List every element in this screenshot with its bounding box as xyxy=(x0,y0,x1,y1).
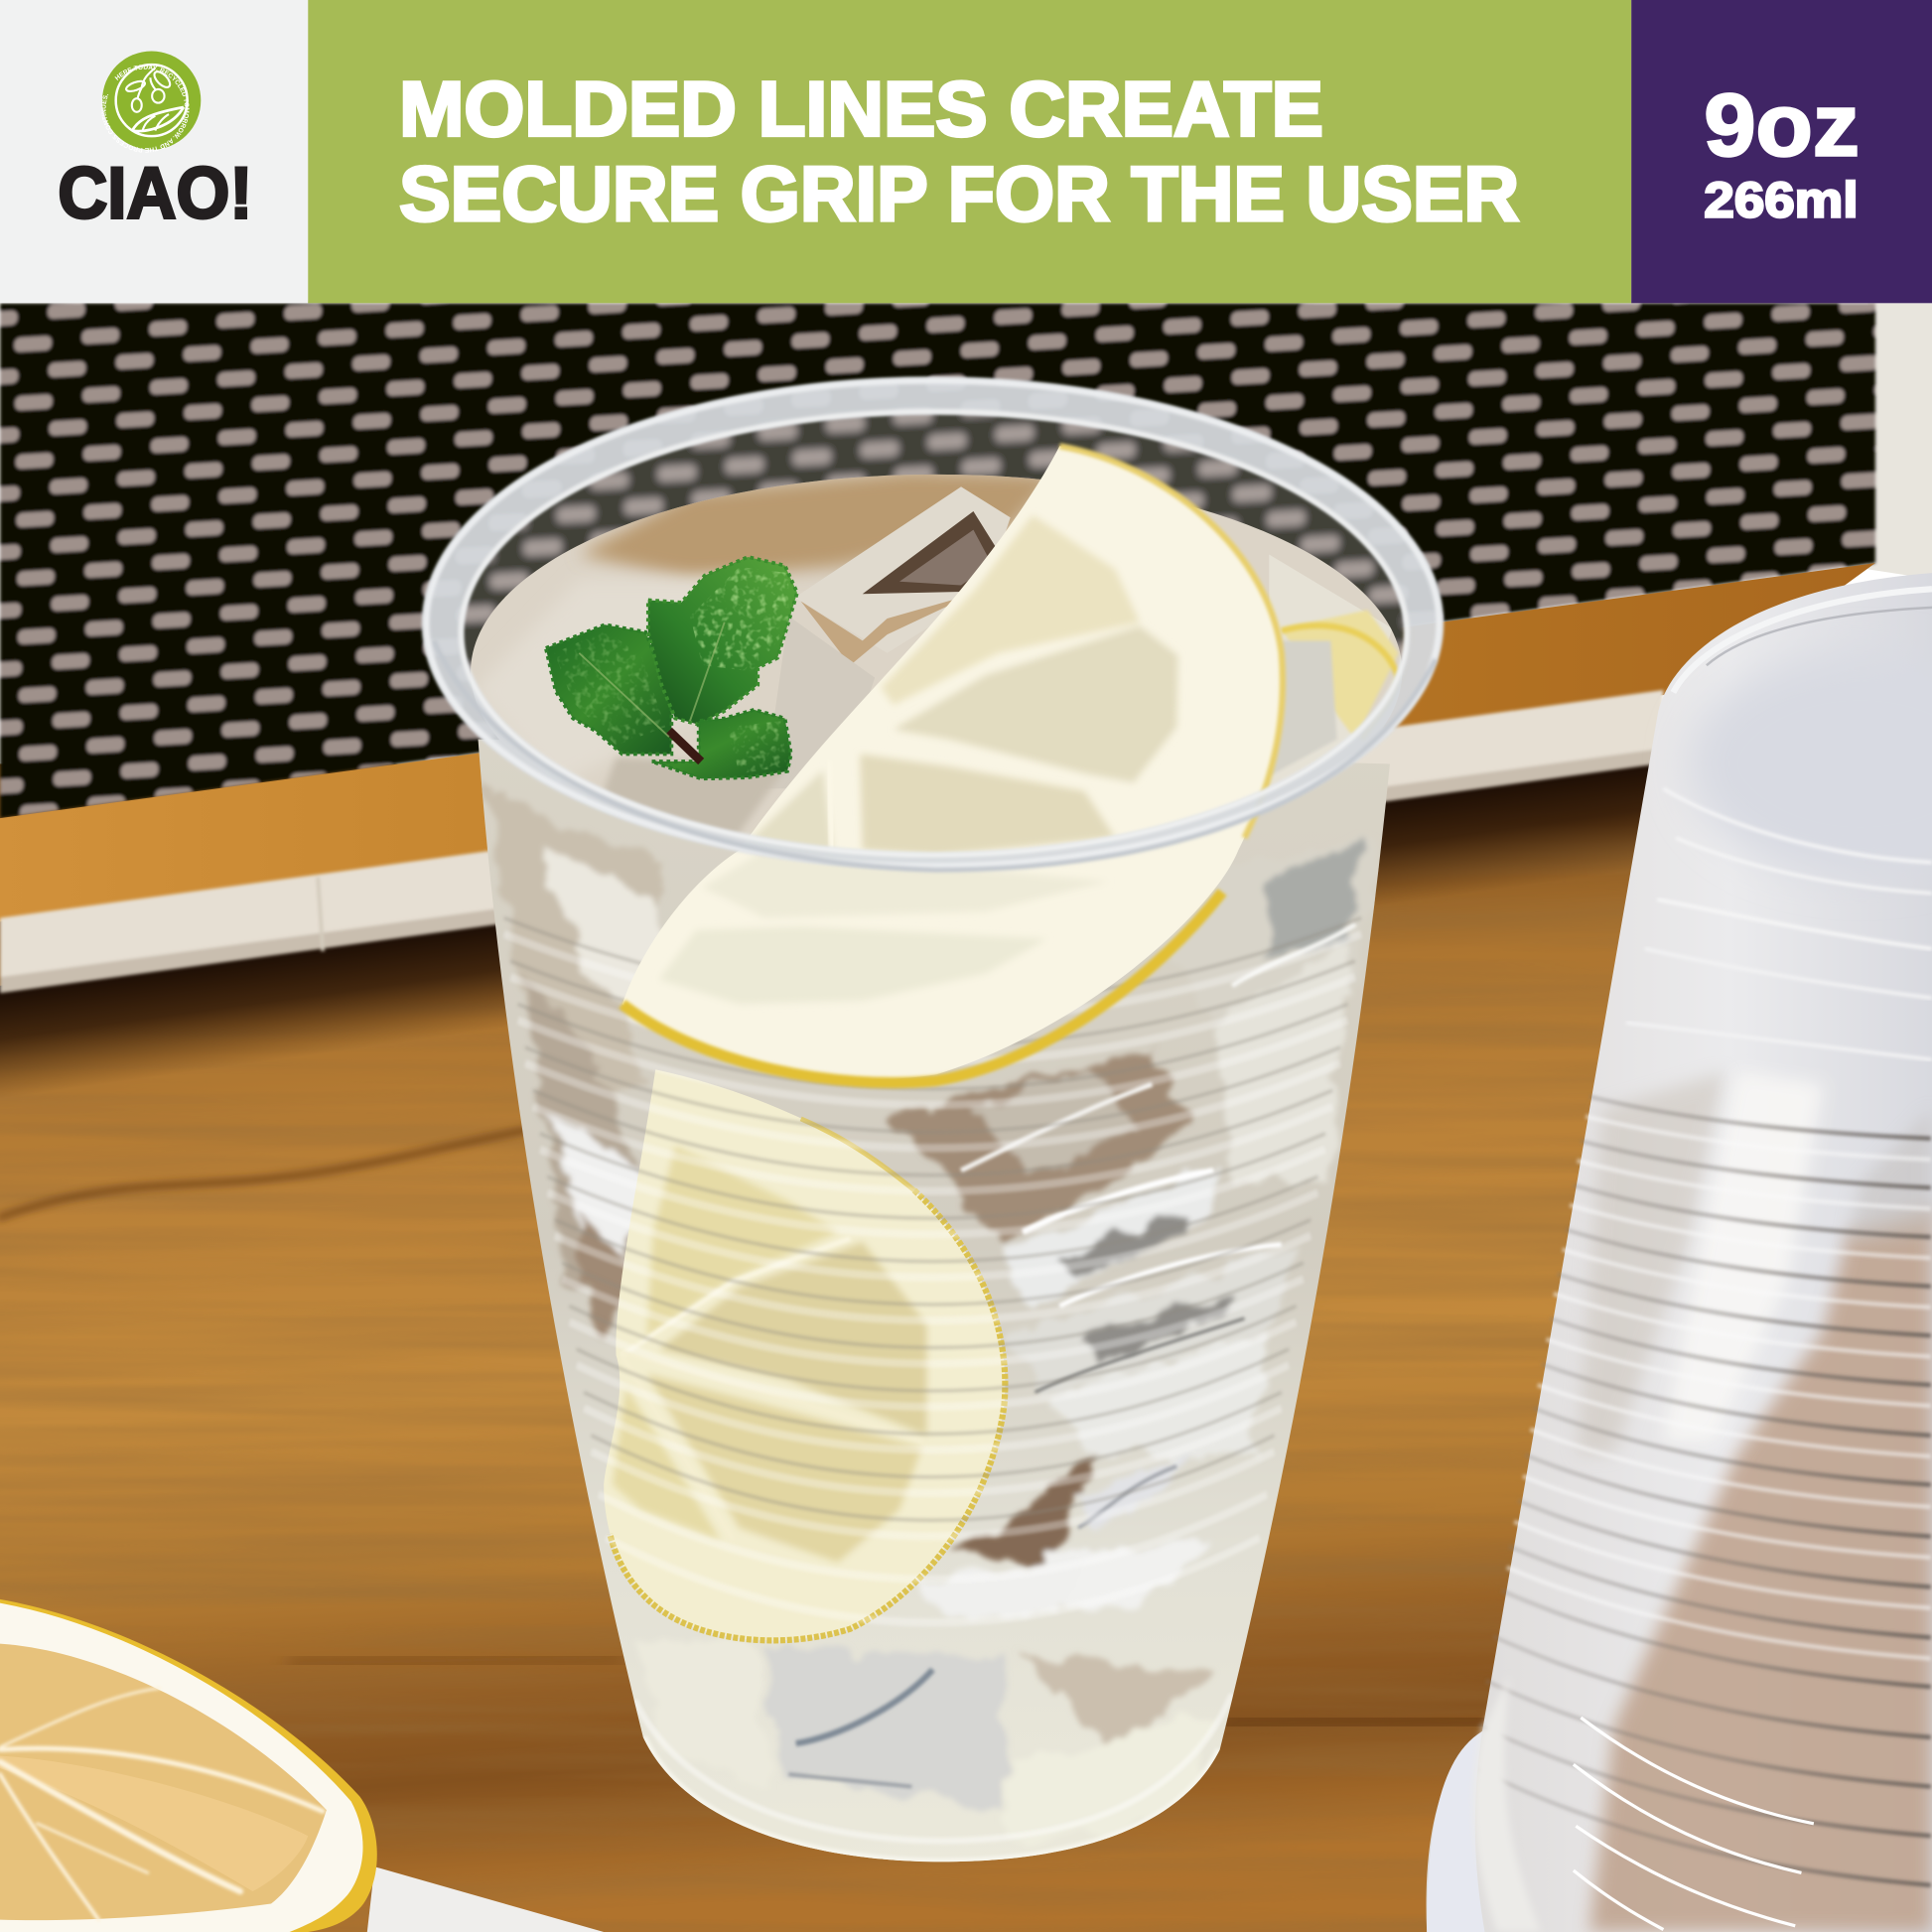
mint left leaf xyxy=(546,624,671,755)
white rope band xyxy=(0,690,1663,993)
icon: recycled leaf badge: HERE TODAY, RECYCLED TOMORROW. AND THE PROCESS CONTINUES. xyxy=(101,65,190,153)
plate corner xyxy=(367,1866,604,1932)
stack foot flange xyxy=(1427,1731,1484,1932)
stacked cups at right xyxy=(1427,573,1932,1932)
size in millilitres: 266ml xyxy=(1704,172,1859,227)
lemon slice bottom-left xyxy=(0,1599,377,1932)
title line 1: MOLDED LINES CREATE xyxy=(399,66,1323,153)
stack brown reflection xyxy=(1589,1207,1932,1932)
mint top leaf xyxy=(648,557,797,725)
panel: logo background xyxy=(0,0,308,303)
cup base ring xyxy=(634,1694,1232,1841)
size in ounces: 9oz xyxy=(1704,74,1860,174)
shadow under the rope band xyxy=(0,755,1657,1140)
cup body xyxy=(479,740,1390,1862)
cup rim xyxy=(422,377,1444,870)
body moulded ribs xyxy=(504,918,1361,1520)
stack moulded ribs xyxy=(1478,1097,1931,1885)
wooden table xyxy=(0,763,1932,1932)
lemon flesh segments xyxy=(659,515,1177,1004)
stack top dome xyxy=(1626,589,1932,1059)
off-white wall at right xyxy=(1867,303,1932,579)
orange wood band xyxy=(0,563,1875,921)
black woven panel xyxy=(0,303,1875,818)
upper lemon wedge xyxy=(622,446,1283,1083)
cup interior wall showing the weave through xyxy=(461,412,1407,855)
main clear cup with lemonade xyxy=(422,377,1444,1862)
title xyxy=(399,66,1519,237)
panel: size background xyxy=(1631,0,1932,303)
panel: headline background xyxy=(308,0,1631,303)
mint sprig xyxy=(546,557,797,778)
logo: CIAO! badge and wordmark xyxy=(58,52,252,234)
header bar xyxy=(0,0,1932,304)
stack body xyxy=(1427,573,1932,1932)
wordmark: CIAO! xyxy=(58,153,252,234)
liquid surface xyxy=(471,471,1402,869)
ice cubes and liquid seen through the cup xyxy=(486,788,1380,1862)
lower lemon slice xyxy=(604,1069,1005,1640)
size callout xyxy=(1704,74,1860,227)
title line 2: SECURE GRIP FOR THE USER xyxy=(399,150,1519,237)
mint lower leaf xyxy=(652,710,791,778)
